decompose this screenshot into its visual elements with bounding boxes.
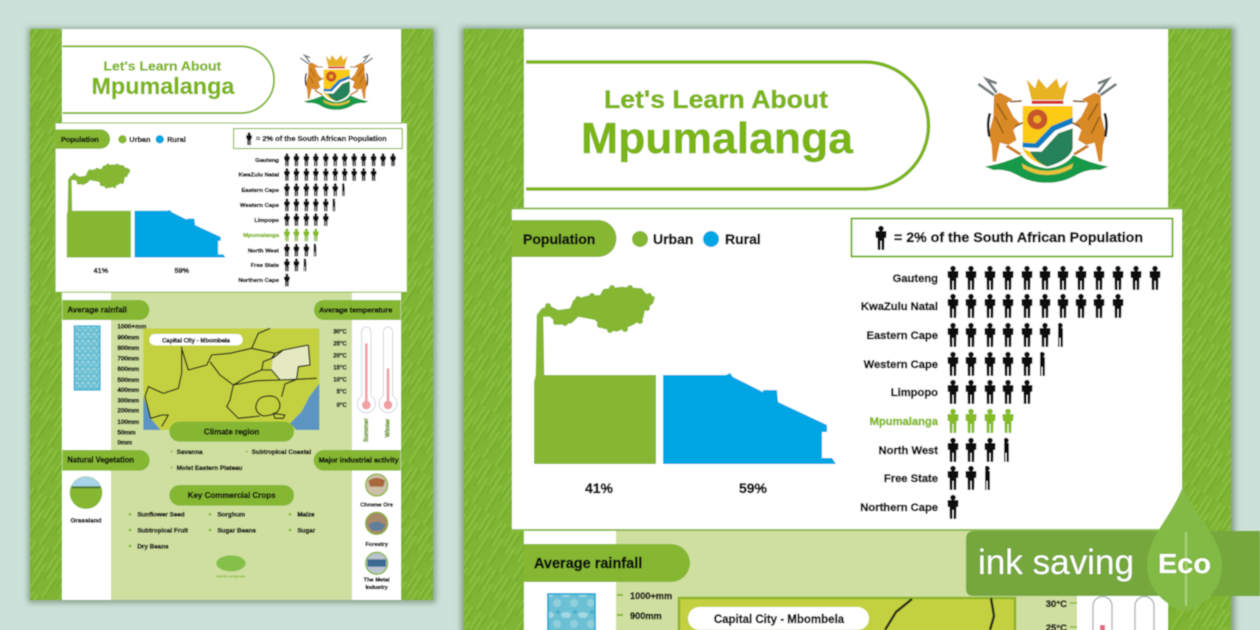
title pill <box>526 62 928 189</box>
temperature: 25°C <box>333 341 347 347</box>
population pill small <box>55 129 110 149</box>
legend: Urban <box>653 231 693 247</box>
rainfall <box>62 300 149 447</box>
industrial activity: Industry <box>365 585 389 591</box>
rainfall: 100mm <box>117 419 140 426</box>
key box small: = 2% of the South African Population <box>256 135 387 143</box>
population pill: Population <box>523 231 595 247</box>
map top: Capital City - Mbombela <box>714 614 845 626</box>
title pill small <box>63 46 274 113</box>
rainfall: 1000+mm <box>117 324 147 331</box>
percent labels: 59% <box>739 480 768 496</box>
natural vegetation: Natural Vegetation <box>67 456 134 465</box>
panel: population <box>512 208 1182 530</box>
province labels: KwaZulu Natal <box>861 301 938 313</box>
logo: twinkl originals <box>216 573 246 578</box>
climate regions: Savanna <box>177 449 203 456</box>
ink saving banner: ink saving <box>978 543 1134 582</box>
province labels: Northern Cape <box>860 502 938 514</box>
title pill small: Mpumalanga <box>91 73 235 99</box>
key crops: Key Commercial Crops <box>188 491 276 500</box>
title pill: Let's Learn About <box>604 86 829 114</box>
rainfall: 0mm <box>117 440 132 447</box>
icon: coat of arms <box>978 78 1116 183</box>
province labels small: Northern Cape <box>238 278 280 284</box>
temperature: Average temperature <box>319 306 392 315</box>
lower section small poster <box>62 300 401 591</box>
province labels small <box>238 158 280 284</box>
rainfall: 300mm <box>117 398 140 405</box>
temperature top <box>1046 596 1154 630</box>
title pill small: Let's Learn About <box>104 59 222 74</box>
map small <box>143 328 319 430</box>
temperature: Summer <box>364 417 370 442</box>
factory small <box>67 163 131 258</box>
province labels small: Western Cape <box>240 203 280 209</box>
climate regions: Moist Eastern Plateau <box>177 465 243 472</box>
temperature: 20°C <box>333 354 347 360</box>
legend small: Urban <box>129 135 151 144</box>
ink saving banner: Eco <box>1158 548 1211 579</box>
industrial activity: Chrome Ore <box>360 503 393 509</box>
rainfall section: Average rainfall <box>534 556 642 572</box>
province labels: North West <box>879 445 938 457</box>
natural vegetation <box>62 450 150 525</box>
title pill: Mpumalanga <box>581 114 854 163</box>
rainfall: 200mm <box>117 408 140 415</box>
rainfall: 900mm <box>117 334 140 341</box>
key crops: Maize <box>297 512 315 519</box>
rainfall: Average rainfall <box>67 306 127 315</box>
rainfall: 500mm <box>117 377 140 384</box>
house rural bar <box>663 373 836 464</box>
temperature: 0°C <box>337 403 347 409</box>
climate regions: Climate region <box>204 427 260 436</box>
industrial activity: Forestry <box>365 542 389 548</box>
map top <box>679 598 1015 630</box>
temperature <box>314 300 401 442</box>
rainfall: 50mm <box>117 430 136 437</box>
key crops: Sugar <box>297 527 316 534</box>
key box: = 2% of the South African Population <box>894 230 1143 245</box>
percent labels <box>585 480 768 496</box>
province labels small: Eastern Cape <box>241 188 280 194</box>
population pill <box>512 220 616 257</box>
key crops: Sorghum <box>217 512 245 519</box>
temperature: 10°C <box>333 377 347 383</box>
rainfall: 400mm <box>117 387 140 394</box>
province labels: Limpopo <box>891 387 938 399</box>
temperature top: 30°C <box>1046 599 1067 610</box>
legend: Rural <box>725 231 761 247</box>
percent labels small: 41% <box>94 266 109 275</box>
panel: population small <box>55 123 407 292</box>
province labels small: Limpopo <box>254 218 279 224</box>
rainfall section: 900mm <box>630 611 662 621</box>
percent labels: 41% <box>585 480 614 496</box>
factory urban bar <box>534 285 656 464</box>
rainfall: 700mm <box>117 355 140 362</box>
legend <box>632 231 761 247</box>
pictogram small <box>284 153 396 286</box>
temperature: Winter <box>386 418 392 437</box>
province labels small: Mpumalanga <box>243 233 280 239</box>
climate regions: Subtropical Coastal <box>252 449 311 456</box>
key crops <box>129 485 316 550</box>
temperature: 15°C <box>333 366 347 372</box>
province labels: Western Cape <box>864 359 938 371</box>
rainfall: 600mm <box>117 366 140 373</box>
panel: large poster <box>461 27 1260 630</box>
rainfall: 800mm <box>117 345 140 352</box>
key box <box>852 218 1172 256</box>
industrial activity: Major industrial activity <box>319 458 399 465</box>
map small: Capital City - Mbombela <box>162 338 231 344</box>
industrial activity: The Metal <box>364 578 390 584</box>
climate regions <box>169 422 311 472</box>
province labels <box>860 273 939 514</box>
population pill small: Population <box>61 135 99 144</box>
logo <box>216 555 246 578</box>
ink saving banner <box>966 486 1260 612</box>
province labels small: KwaZulu Natal <box>239 173 279 179</box>
province labels: Mpumalanga <box>870 416 939 428</box>
rainfall section: 1000+mm <box>630 591 672 601</box>
province labels: Gauteng <box>893 273 938 285</box>
key crops: Sunflower Seed <box>137 512 185 519</box>
key crops: Subtropical Fruit <box>137 527 189 534</box>
panel: small poster preview <box>28 28 436 603</box>
percent labels small <box>94 266 190 275</box>
industrial activity <box>314 450 401 591</box>
temperature: 5°C <box>337 390 347 396</box>
legend small: Rural <box>167 135 186 144</box>
icon: coat of arms small <box>300 55 373 110</box>
province labels small: North West <box>248 248 279 254</box>
province labels small: Free State <box>251 263 280 269</box>
percent labels small: 59% <box>174 266 190 275</box>
province labels: Free State <box>884 473 938 485</box>
province labels small: Gauteng <box>255 158 279 164</box>
legend small <box>118 135 186 144</box>
rainfall section <box>524 544 690 630</box>
pictogram chart <box>948 266 1160 519</box>
natural vegetation: Grassland <box>71 518 102 525</box>
key crops: Sugar Beans <box>217 527 256 534</box>
province labels: Eastern Cape <box>866 330 938 342</box>
house small <box>135 210 225 258</box>
key box small <box>234 129 402 149</box>
temperature: 30°C <box>333 330 347 336</box>
key crops: Dry Beans <box>137 543 169 550</box>
